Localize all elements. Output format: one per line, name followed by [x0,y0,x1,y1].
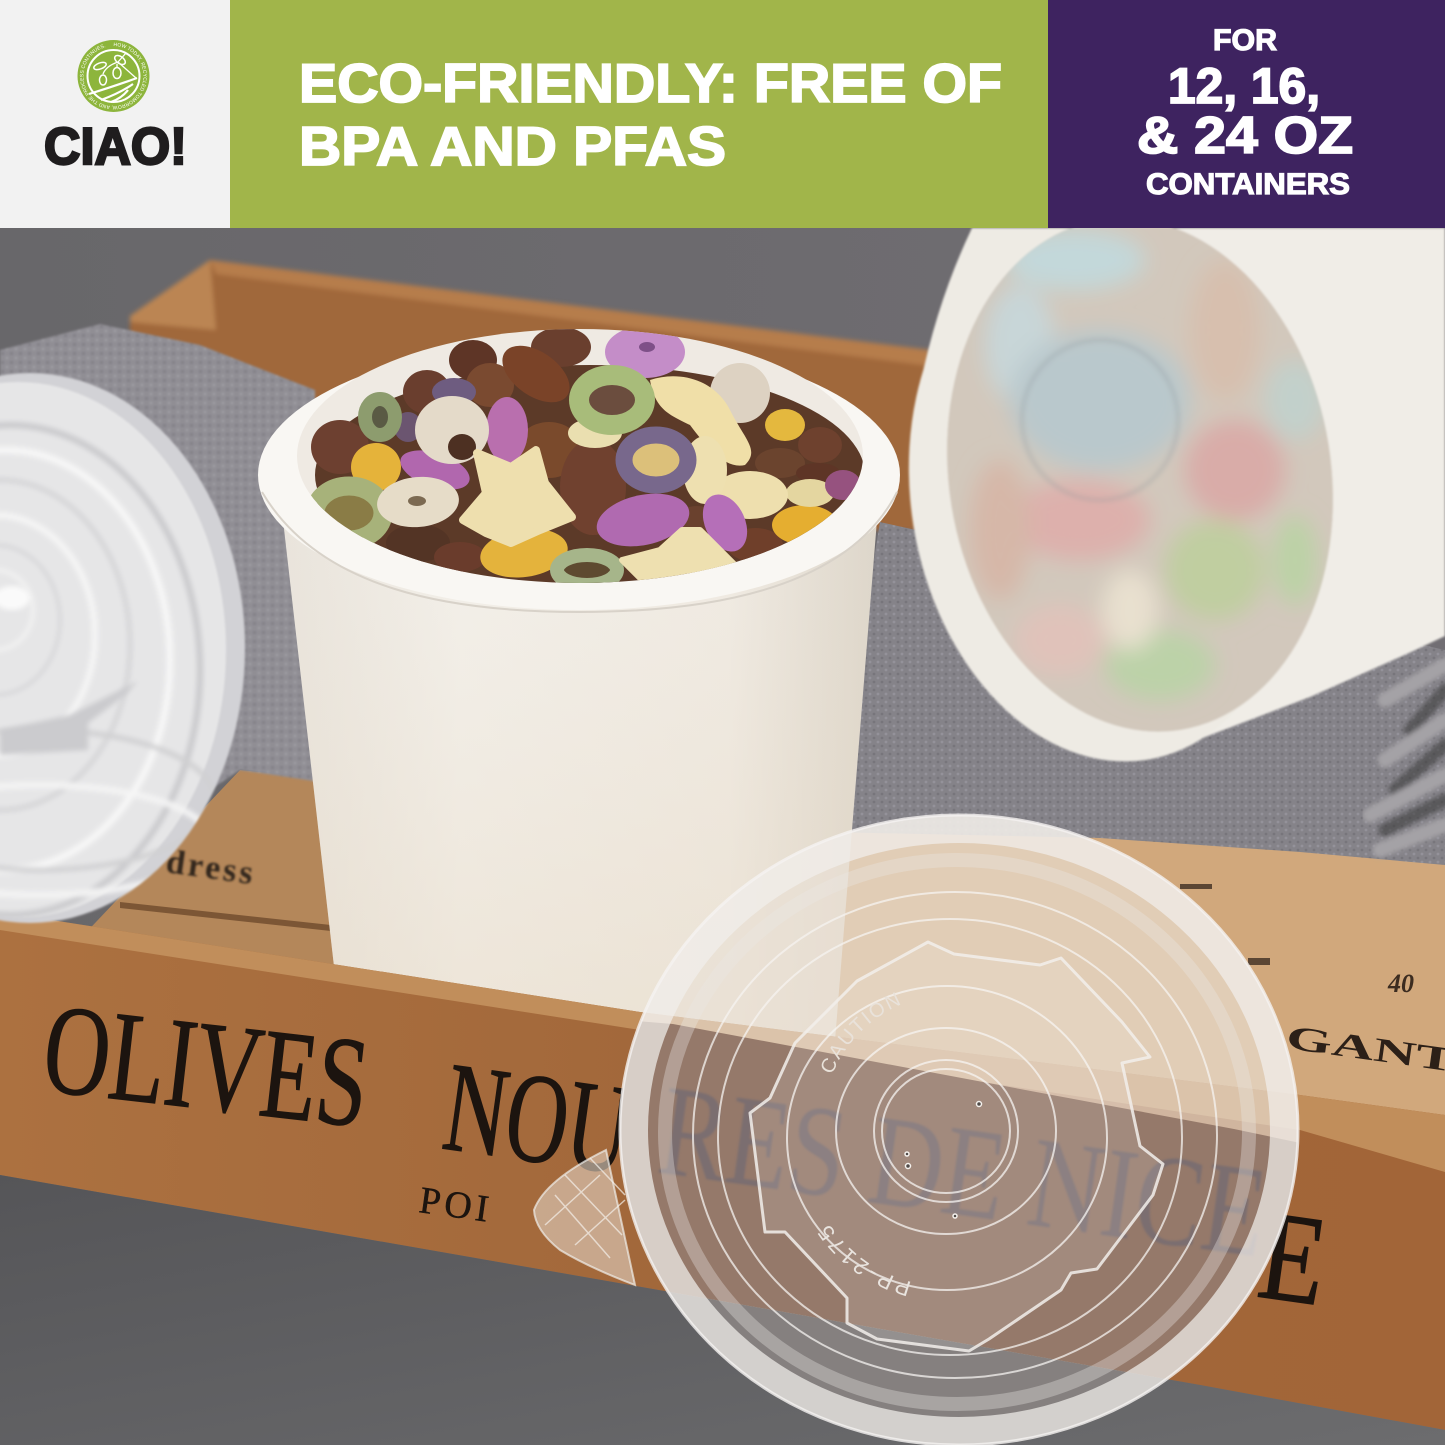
printed wood lettering: E [1251,1183,1335,1333]
clear lid in foreground [533,814,1300,1445]
sizes text: FOR [1213,24,1277,57]
clear lid in foreground: CAUTION [822,992,900,1072]
cream ring and stars [375,450,735,578]
printed wood lettering: NOU [436,1035,639,1201]
printed wood lettering: POI [417,1179,495,1231]
printed wood lettering [37,977,1335,1333]
lid over concrete [670,1292,1164,1444]
grey cloth [0,324,1445,930]
tray floor [60,770,1445,1125]
left plastic lid [0,373,245,923]
lid rim [634,829,1284,1431]
blue print seen through lid: RES DE NICE [651,1058,1275,1286]
blurred cereal through lid [972,228,1326,708]
floor lettering: dress [164,843,258,892]
logo emblem: HOW TODAY, RECYCLED TOMORROW, AND THE PROCESS CONTINUES. [80,42,147,110]
sizes text: & 24 OZ [1137,107,1353,165]
printed wood lettering: OLIVES [37,977,376,1155]
sizes text: CONTAINERS [1146,168,1350,201]
header: headline panel [230,0,1048,228]
tray floor: 40 [1387,969,1414,998]
lid over tray front [622,1022,1296,1378]
logo wordmark: CIAO! [44,118,187,176]
paper cup body [258,329,900,1040]
lid vent holes [905,1102,982,1218]
headline text: ECO-FRIENDLY: FREE OF [299,52,1002,114]
ring pieces [315,375,688,585]
cereal [311,326,865,585]
header: sizes panel [1048,0,1445,228]
lid pull tab [534,1150,635,1285]
lid embossed text: PP-2175 [818,1226,910,1296]
cream and yellow pieces [351,363,838,583]
lid embossed ring [750,942,1163,1351]
header: logo panel [0,0,230,228]
cup rim [258,376,900,610]
tray back wall [130,260,930,530]
cloth fringe [1370,665,1445,850]
concrete surface [0,1175,1445,1445]
headline text [299,52,1002,177]
pink and purple pieces [396,326,861,559]
lid over light background [642,816,1296,1372]
headline text: BPA AND PFAS [299,115,726,177]
tray front panel [0,912,1445,1430]
tray floor: GANT [1284,1019,1445,1080]
chocolate pieces [311,327,842,572]
sizes text: 12, 16, [1168,58,1320,114]
sizes text [1137,24,1353,201]
right cup, lying on its side [907,228,1445,763]
